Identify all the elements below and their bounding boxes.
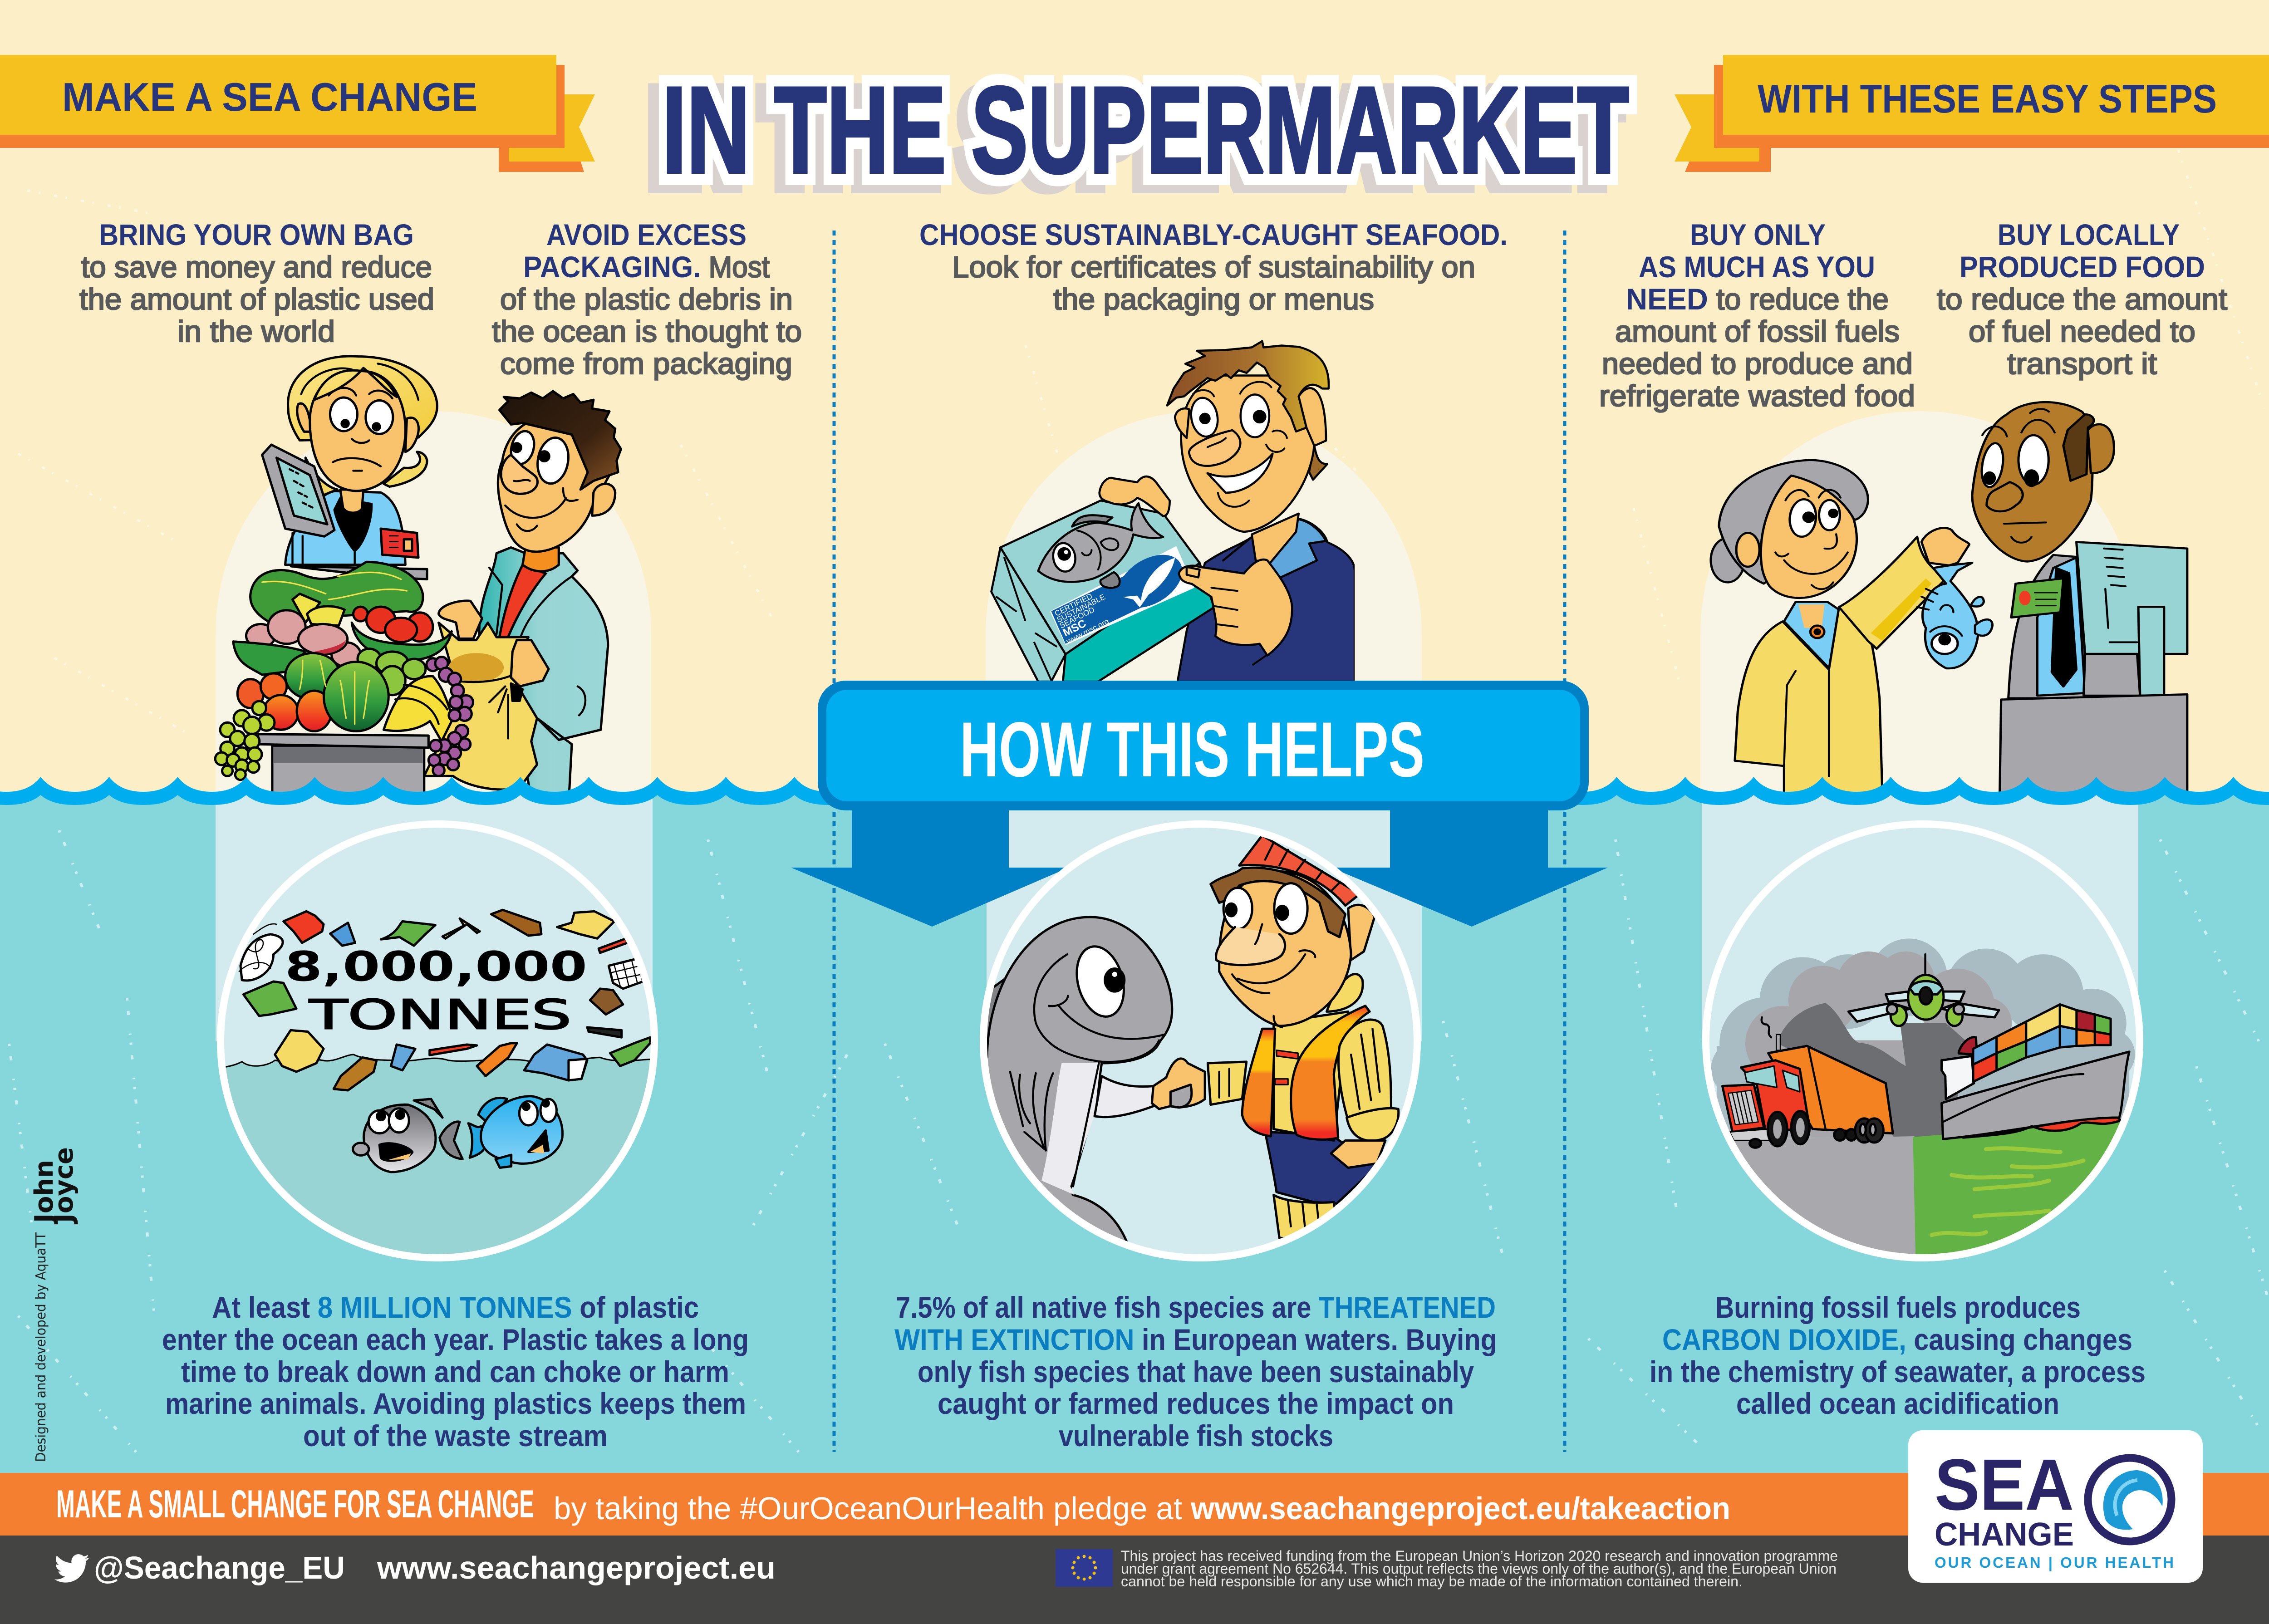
illustration: man pointing at MSC labelled fish box: [991, 341, 1355, 682]
smoke cloud: [1711, 938, 2135, 1140]
shopper woman: [1711, 460, 1969, 797]
icon: twitter bird: [54, 1554, 89, 1583]
stall table: [258, 734, 428, 801]
website: www.seachangeproject.eu: [377, 1550, 776, 1585]
dotted divider right: [1563, 231, 1567, 1452]
text: buy only as much as you need: [1599, 218, 1915, 412]
funding notice: cannot be held responsible for any use which may be made of the information contained therein.: [1121, 1573, 1743, 1590]
text: bring your own bag: [79, 218, 434, 348]
fish box with MSC label: CERTIFIED: [1053, 591, 1094, 618]
fish box with MSC label: www.msc.org: [1065, 617, 1110, 646]
Sea Change logo: CHANGE: [1935, 1516, 2074, 1553]
arrow right: [1331, 808, 1608, 927]
text: threatened fish facts: WITH EXTINCTION in European waters. Buying: [894, 1323, 1497, 1356]
dark footer bar: [0, 1536, 2269, 1624]
text: bring your own bag: in the world: [177, 314, 335, 348]
fish box with MSC label: SUSTAINABLE: [1055, 592, 1107, 624]
title: [651, 62, 1629, 207]
Sea Change logo: [1908, 1430, 2203, 1583]
wavy water line: [0, 771, 2269, 808]
artist signature: John: [29, 1160, 59, 1225]
fish box with MSC label: SEAFOOD: [1058, 605, 1096, 630]
text: avoid excess packaging: the ocean is thought to: [492, 314, 802, 348]
shopkeeper man: [1972, 402, 2114, 698]
text: threatened fish facts: vulnerable fish stocks: [1059, 1419, 1333, 1452]
arch panel left: [216, 411, 651, 799]
funding notice: This project has received funding from the European Union’s Horizon 2020 research and innovation programme: [1121, 1548, 1838, 1564]
text: choose sustainably caught seafood: CHOOSE SUSTAINABLY-CAUGHT SEAFOOD.: [919, 218, 1508, 251]
title: IN: [651, 70, 739, 207]
text: threatened fish facts: caught or farmed reduces the impact on: [938, 1387, 1454, 1420]
road and green sea: [1699, 1118, 2149, 1266]
floating plastic debris: [239, 910, 650, 1090]
text: plastic facts: marine animals. Avoiding plastics keeps them: [165, 1387, 746, 1420]
circle: plastic in the ocean: [221, 824, 654, 1264]
funding notice: under grant agreement No 652644. This output reflects the views only of the author(s), and the European Union: [1121, 1560, 1837, 1577]
cashier woman: [262, 356, 437, 565]
text: carbon dioxide facts: called ocean acidification: [1736, 1387, 2059, 1420]
artist signature: [29, 1147, 79, 1225]
text: avoid excess packaging: come from packaging: [500, 347, 792, 380]
text: choose sustainably caught seafood: Look for certificates of sustainability on: [952, 250, 1475, 284]
text: choose sustainably caught seafood: the packaging or menus: [1053, 282, 1374, 316]
text: buy only as much as you need: needed to produce and: [1602, 347, 1913, 380]
Sea Change logo: SEA: [1935, 1444, 2074, 1525]
text: plastic facts: time to break down and can choke or harm: [181, 1355, 729, 1388]
text: avoid excess packaging: PACKAGING. Most: [523, 250, 770, 284]
text: bring your own bag: to save money and reduce: [81, 250, 432, 284]
orange call to action bar: [0, 1473, 2269, 1536]
smiling fish: [976, 917, 1205, 1244]
fisherman: [1208, 835, 1399, 1241]
text: choose sustainably caught seafood: [919, 218, 1508, 316]
arch panel right: [1700, 411, 2138, 799]
right ribbon banner: [1675, 55, 2269, 172]
how this helps banner: [818, 681, 1589, 810]
sea under the surface: [222, 1055, 654, 1264]
title: THE: [774, 62, 946, 199]
text: plastic facts: [162, 1290, 749, 1452]
dotted divider left: [832, 231, 836, 1452]
text: carbon dioxide facts: [1650, 1290, 2146, 1420]
text: buy locally produced food: PRODUCED FOOD: [1960, 250, 2205, 284]
funding notice: [1121, 1548, 1838, 1590]
grey fish: [353, 1099, 462, 1172]
circle: fossil fuel transport: [1699, 824, 2149, 1266]
side credit: Designed and developed by AquaTT: [33, 1232, 49, 1462]
orange call to action bar: www.seachangeproject.eu/takeaction: [1190, 1491, 1730, 1526]
fish box with MSC label: [991, 476, 1292, 682]
blue fish held by tail: [1917, 563, 1993, 668]
text: carbon dioxide facts: Burning fossil fuels produces: [1715, 1290, 2081, 1324]
orange call to action bar: MAKE A SMALL CHANGE FOR SEA CHANGE: [56, 1482, 534, 1526]
aeroplane: [1848, 954, 1999, 1026]
title: SUPERMARKET: [971, 62, 1629, 199]
blue fish: [468, 1096, 562, 1168]
text: plastic facts: At least 8 MILLION TONNES of plastic: [212, 1290, 699, 1324]
water background: [0, 794, 2269, 1475]
circle: fish and fisherman shaking hands: [976, 824, 1417, 1258]
orange call to action bar: by taking the #OurOceanOurHealth pledge at: [554, 1491, 1182, 1526]
title: SUPERMARKET: [960, 70, 1618, 207]
right ribbon banner: WITH THESE EASY STEPS: [1758, 76, 2217, 121]
cream paper texture: [18, 150, 2264, 735]
lower light panel right: [1702, 794, 2138, 1041]
text: buy locally produced food: of fuel needed to: [1969, 314, 2195, 348]
speckled texture: [9, 830, 2269, 1452]
icon: EU flag: [1056, 1549, 1113, 1587]
text: threatened fish facts: only fish species that have been sustainably: [918, 1355, 1474, 1388]
left ribbon banner: MAKE A SEA CHANGE: [62, 74, 477, 119]
text: buy only as much as you need: BUY ONLY: [1690, 218, 1826, 251]
computer monitor: [2077, 542, 2187, 696]
fish box with MSC label: MSC: [1061, 617, 1088, 639]
lower light panel centre: [987, 794, 1422, 1041]
text: avoid excess packaging: AVOID EXCESS: [546, 218, 747, 251]
counter: [2000, 694, 2187, 797]
text: buy locally produced food: BUY LOCALLY: [1998, 218, 2180, 251]
text: threatened fish facts: [894, 1290, 1497, 1452]
text: bring your own bag: the amount of plastic used: [79, 282, 434, 316]
man with blue shirt: [1167, 341, 1355, 682]
social handle: @Seachange_EU: [94, 1550, 345, 1585]
illustration: woman showing fish to shopkeeper: [1711, 402, 2187, 797]
text: buy only as much as you need: amount of fossil fuels: [1615, 314, 1900, 348]
text: threatened fish facts: 7.5% of all native fish species are THREATENED: [896, 1290, 1496, 1324]
lorry: [1723, 1017, 1893, 1148]
arrow left: [791, 808, 1069, 927]
text: avoid excess packaging: [492, 218, 802, 380]
title: IN: [662, 62, 750, 199]
illustration: shoppers at fruit stall: [215, 356, 621, 801]
text: carbon dioxide facts: CARBON DIOXIDE, causing changes: [1662, 1323, 2132, 1356]
text: buy locally produced food: [1937, 218, 2227, 380]
Sea Change logo: OUR OCEAN | OUR HEALTH: [1935, 1554, 2174, 1571]
text: plastic facts: enter the ocean each year. Plastic takes a long: [162, 1323, 749, 1356]
arch panel centre: [986, 411, 1422, 799]
how this helps banner: HOW THIS HELPS: [960, 706, 1424, 793]
text: carbon dioxide facts: in the chemistry of seawater, a process: [1650, 1355, 2146, 1388]
8,000,000 tonnes lettering: [288, 950, 584, 1030]
title: THE: [763, 70, 935, 207]
text: buy locally produced food: to reduce the amount: [1937, 282, 2227, 316]
8,000,000 tonnes lettering: 8,000,000: [285, 943, 587, 991]
text: buy only as much as you need: AS MUCH AS YOU: [1639, 250, 1875, 284]
text: bring your own bag: BRING YOUR OWN BAG: [99, 218, 414, 251]
fruit and vegetables pile: [215, 562, 473, 780]
title: SUPERMARKET: [971, 62, 1629, 199]
text: buy only as much as you need: NEED to reduce the: [1626, 282, 1889, 316]
text: buy only as much as you need: refrigerate wasted food: [1599, 379, 1915, 412]
container ship: [1942, 1005, 2129, 1139]
text: plastic facts: out of the waste stream: [303, 1419, 608, 1452]
customer man: [424, 391, 621, 799]
artist signature: Joyce: [49, 1147, 79, 1225]
title: THE: [774, 62, 946, 199]
text: buy locally produced food: transport it: [2007, 347, 2157, 380]
text: avoid excess packaging: of the plastic debris in: [500, 282, 793, 316]
8,000,000 tonnes lettering: TONNES: [309, 991, 571, 1039]
title: IN: [662, 62, 750, 199]
left ribbon banner: [0, 55, 595, 172]
lower light panel left: [216, 794, 653, 1041]
